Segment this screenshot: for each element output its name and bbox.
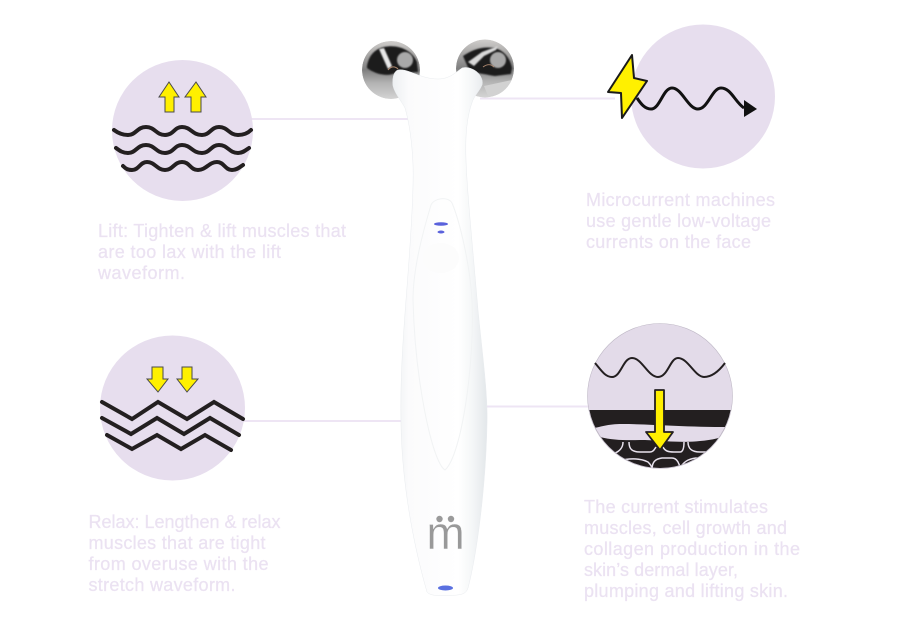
right metal roller ball — [456, 40, 514, 98]
left metal roller ball — [362, 41, 420, 99]
icon: stretch waveforms — [102, 402, 243, 450]
relax caption — [88, 512, 280, 595]
stimulation caption: skin’s dermal layer, — [584, 560, 738, 580]
wand body — [393, 67, 487, 596]
connector: lift — [250, 118, 410, 120]
panel: microcurrent — [586, 24, 775, 252]
microcurrent circle — [631, 24, 775, 168]
icon: lift waveforms — [114, 127, 251, 170]
skin circle — [588, 324, 732, 468]
lift caption: Lift: Tighten & lift muscles that — [98, 221, 346, 241]
panel: lift — [97, 60, 346, 283]
icon: current wave with arrow — [637, 88, 757, 117]
relax caption: Relax: Lengthen & relax — [88, 512, 280, 532]
icon: up arrows — [159, 82, 206, 112]
relax caption: stretch waveform. — [88, 575, 236, 595]
relax circle — [100, 336, 245, 480]
brand mark: m — [426, 507, 465, 559]
bottom charging light — [438, 586, 453, 590]
relax caption: from overuse with the — [88, 554, 268, 574]
stimulation caption: collagen production in the — [584, 539, 800, 559]
blue indicator lights — [434, 222, 448, 234]
stimulation caption — [584, 497, 800, 601]
microcurrent caption: use gentle low-voltage — [586, 211, 771, 231]
collagen cells — [615, 442, 706, 468]
connector: relax — [243, 420, 403, 422]
lift caption — [97, 221, 346, 283]
microcurrent caption: currents on the face — [586, 232, 751, 252]
connector: microcurrent — [480, 98, 615, 100]
stimulation caption: The current stimulates — [584, 497, 768, 517]
infographic canvas — [88, 24, 800, 602]
lift caption: waveform. — [97, 263, 185, 283]
stimulation caption: muscles, cell growth and — [584, 518, 787, 538]
device: microcurrent roller wand — [362, 40, 514, 596]
icon: skin layers — [589, 410, 731, 468]
panel: relax — [88, 336, 280, 595]
icon: down arrow into skin — [646, 390, 673, 450]
lift circle — [112, 60, 253, 201]
microcurrent caption — [586, 190, 775, 252]
icon: down arrows — [147, 367, 198, 392]
panel: skin stimulation — [584, 324, 800, 601]
upper control panel outline — [413, 199, 472, 470]
icon: skin wave — [595, 358, 725, 377]
stimulation caption: plumping and lifting skin. — [584, 581, 788, 601]
icon: lightning bolt — [608, 55, 647, 118]
connector: stimulation — [484, 406, 590, 408]
button highlight — [423, 243, 459, 273]
microcurrent caption: Microcurrent machines — [586, 190, 775, 210]
relax caption: muscles that are tight — [88, 533, 266, 553]
lift caption: are too lax with the lift — [98, 242, 281, 262]
